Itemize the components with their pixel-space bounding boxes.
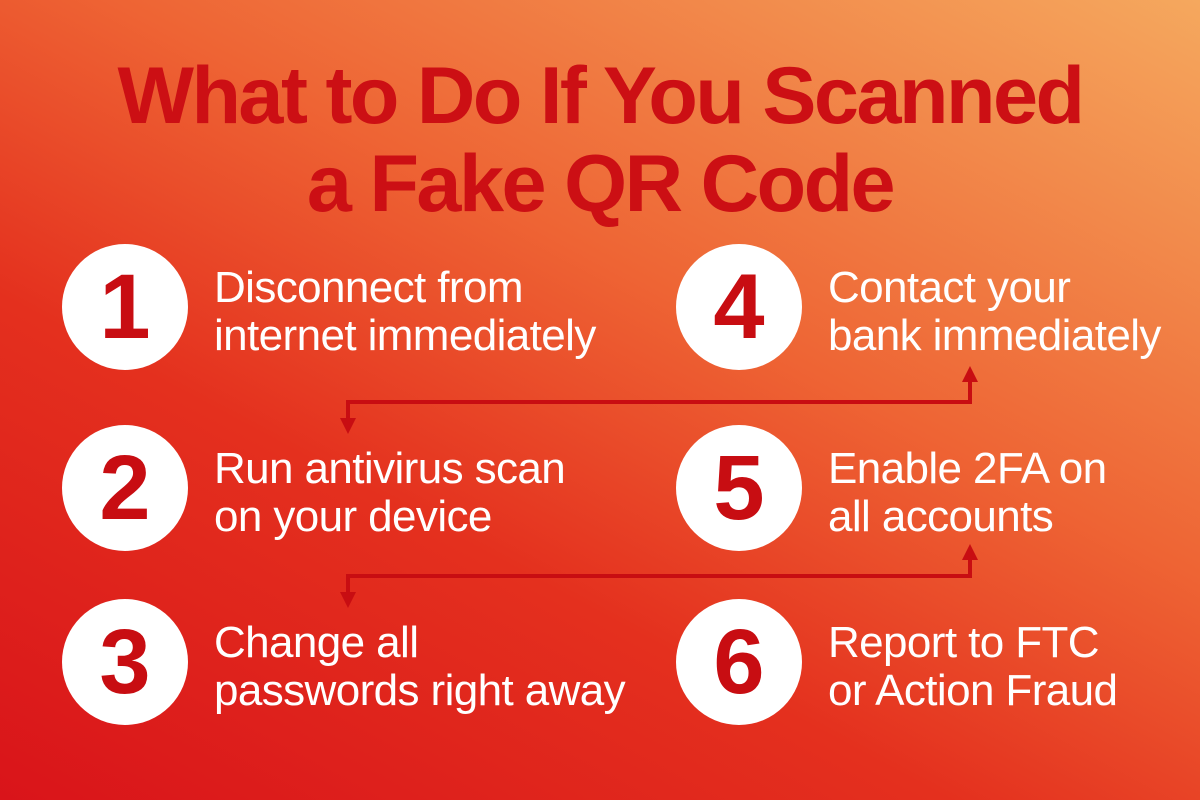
step 2: 2 [99,437,151,539]
step 4: bank immediately [828,311,1161,360]
step 1: internet immediately [214,311,596,360]
title: What to Do If You Scanned [118,51,1082,141]
step 5: all accounts [828,492,1053,541]
step 3: 3 [99,611,151,713]
step 6: 6 [713,611,765,713]
title [118,51,1082,229]
title: a Fake QR Code [307,139,893,229]
step 1 [62,244,596,370]
step 2: Run antivirus scan [214,444,565,493]
step 4 [676,244,1162,370]
step 1: 1 [99,256,151,358]
step 3: Change all [214,618,418,667]
step 5 [676,425,1106,551]
step 6: Report to FTC [828,618,1099,667]
step 4: 4 [713,256,765,358]
arrow: lower connector [340,544,978,608]
step 2 [62,425,565,551]
step 6: or Action Fraud [828,666,1117,715]
step 3 [62,599,626,725]
step 4: Contact your [828,263,1070,312]
step 2: on your device [214,492,492,541]
step 3: passwords right away [214,666,625,715]
arrow: upper connector [340,366,978,434]
step 5: 5 [713,437,765,539]
step 1: Disconnect from [214,263,523,312]
step 6 [676,599,1117,725]
step 5: Enable 2FA on [828,444,1106,493]
